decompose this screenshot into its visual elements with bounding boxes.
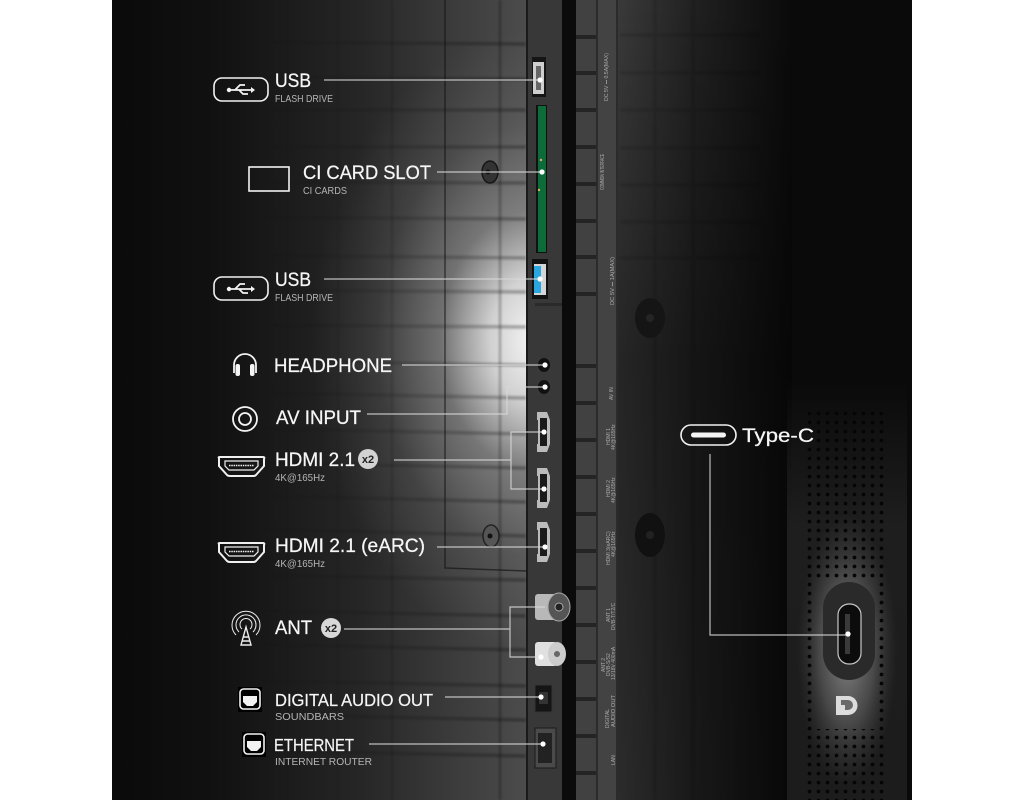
printed port labels on bezel: ANT 1 <box>606 608 612 622</box>
connector strip <box>526 0 563 800</box>
port: antenna 2 <box>535 642 566 666</box>
icon: USB <box>214 78 268 101</box>
printed port labels on bezel: AUDIO OUT <box>611 695 617 727</box>
printed port labels on bezel: ANT 2 <box>601 658 607 672</box>
USB flash drive callout 2: USB <box>275 270 311 291</box>
CI card slot callout: CI CARDS <box>303 185 347 197</box>
USB flash drive callout 2 <box>214 270 543 304</box>
ethernet callout: INTERNET ROUTER <box>275 756 372 768</box>
AV input callout: AV INPUT <box>276 408 361 429</box>
ports column <box>532 57 570 768</box>
port: HDMI 1 <box>537 412 550 452</box>
port: antenna 1 <box>535 593 570 621</box>
printed port labels on bezel: AV IN <box>609 387 615 400</box>
left rear surface with light glow <box>112 0 526 800</box>
icon: HDMI <box>219 543 264 562</box>
USB flash drive callout 1 <box>214 71 543 105</box>
port opening <box>838 604 861 664</box>
port: headphone and AV jacks <box>538 358 550 394</box>
ethernet callout <box>242 732 546 768</box>
printed port labels on bezel: HDMI 2 <box>606 480 612 497</box>
antenna callout <box>232 607 545 660</box>
HDMI x2 callout: HDMI 2.1 <box>275 450 355 471</box>
antenna callout: ANT <box>275 618 312 639</box>
AV input callout <box>233 384 548 431</box>
badge: x2: x2 <box>325 623 337 635</box>
digital audio out callout <box>238 687 544 723</box>
port: USB 3.0 blue <box>532 259 548 299</box>
HDMI x2 callout: 4K@165Hz <box>275 472 325 484</box>
printed port labels on bezel: DC 5V ⎓ 0.5A(MAX) <box>604 53 610 101</box>
ethernet callout: ETHERNET <box>274 735 354 755</box>
icon: DP logo <box>836 696 858 715</box>
digital audio out callout: DIGITAL AUDIO OUT <box>275 690 433 710</box>
icon: AV jack <box>233 407 257 431</box>
printed port labels on bezel: COMMON INTERFACE <box>600 154 606 190</box>
port: ethernet <box>535 728 556 768</box>
printed port labels on bezel: 13/18V 400mA <box>611 646 617 680</box>
printed port labels on bezel: DC 5V ⎓ 1A(MAX) <box>610 257 616 305</box>
icon: Type-C <box>681 425 736 445</box>
icon: USB <box>214 277 268 300</box>
Type-C callout: Type-C <box>742 426 814 447</box>
icon: HDMI <box>219 457 264 476</box>
badge: x2 <box>358 449 378 469</box>
port: HDMI 2 <box>537 468 550 508</box>
right rear surface <box>617 0 792 800</box>
icon: optical port <box>238 687 262 712</box>
digital audio out callout: SOUNDBARS <box>275 711 344 723</box>
speaker panel <box>787 380 907 800</box>
printed port labels on bezel: 4K@165Hz <box>611 424 617 450</box>
port bezel <box>823 582 875 680</box>
Type-C callout <box>681 425 851 637</box>
icon: CI card <box>249 167 289 191</box>
USB flash drive callout 2: FLASH DRIVE <box>275 292 333 304</box>
printed port labels on bezel: LAN <box>611 755 617 765</box>
printed port labels on bezel: DIGITAL <box>605 709 611 728</box>
icon: antenna <box>232 611 260 645</box>
HDMI eARC callout <box>219 536 548 570</box>
CI card slot callout: CI CARD SLOT <box>303 163 431 184</box>
printed port labels on bezel: 4K@165Hz <box>611 531 617 557</box>
screws <box>482 161 665 557</box>
badge: x2: x2 <box>362 454 374 466</box>
printed port labels on bezel: HDMI 1 <box>606 428 612 445</box>
CI card slot callout <box>249 163 545 197</box>
badge: x2 <box>321 618 341 638</box>
port: optical audio <box>535 685 552 712</box>
icon: headphones <box>234 354 256 376</box>
headphone callout <box>234 354 548 377</box>
HDMI eARC callout: HDMI 2.1 (eARC) <box>275 536 425 557</box>
printed port labels on bezel <box>600 53 617 765</box>
printed port labels on bezel: DVB-S/S2 <box>606 653 612 676</box>
port: CI card slot <box>536 105 547 253</box>
HDMI eARC callout: 4K@165Hz <box>275 558 325 570</box>
printed port labels on bezel: HDMI 3(eARC) <box>606 531 612 565</box>
icon: ethernet <box>242 732 266 757</box>
headphone callout: HEADPHONE <box>274 356 392 377</box>
Type-C port close-up <box>823 582 875 715</box>
port: USB 2.0 <box>532 57 546 97</box>
printed port labels on bezel: DVB-T/T2/C <box>611 602 617 630</box>
USB flash drive callout 1: USB <box>275 71 311 92</box>
photo background: TV rear panel <box>112 0 912 800</box>
printed port labels on bezel: 4K@165Hz <box>611 477 617 503</box>
USB flash drive callout 1: FLASH DRIVE <box>275 93 333 105</box>
HDMI x2 callout <box>219 429 547 492</box>
port: HDMI 3 <box>537 522 550 562</box>
